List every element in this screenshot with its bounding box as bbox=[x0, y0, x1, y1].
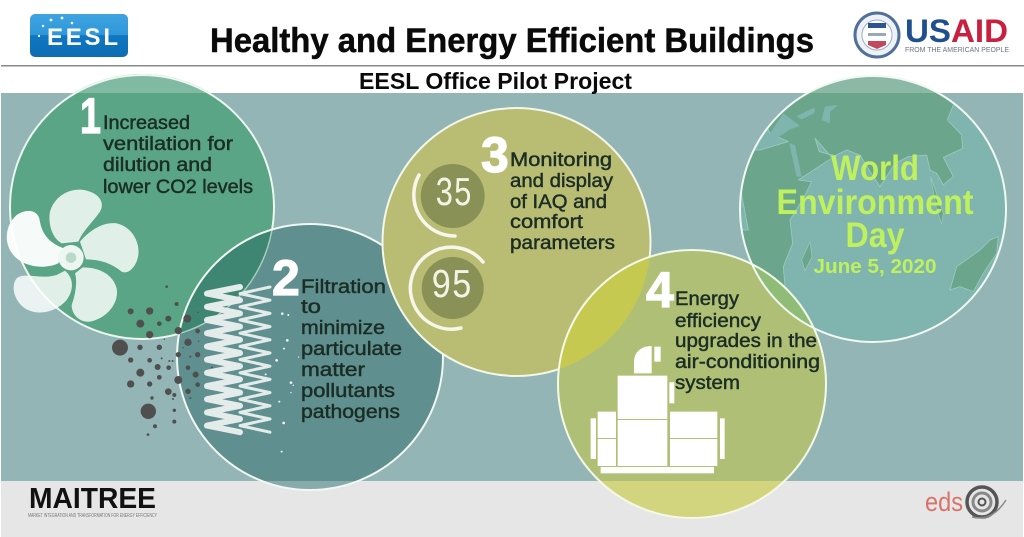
text block: World Environment Day: June 5, 2020 bbox=[814, 256, 936, 278]
description 2: to bbox=[301, 297, 321, 318]
logo: eds: eds bbox=[925, 487, 963, 517]
description 3: comfort bbox=[510, 212, 584, 233]
description 4: efficiency bbox=[675, 311, 762, 332]
description 2: Filtration bbox=[301, 277, 386, 298]
description 4: system bbox=[675, 373, 740, 394]
description 3: parameters bbox=[510, 233, 615, 254]
description 3: of IAQ and bbox=[510, 192, 607, 213]
gauge: reading 95 bbox=[410, 247, 484, 329]
text block: step 4 bbox=[646, 262, 820, 394]
description 1: Increased bbox=[103, 113, 190, 134]
title: Healthy and Energy Efficient Buildings bbox=[210, 22, 814, 60]
icon: particles bbox=[112, 285, 221, 436]
logo: MAITREE: MAITREE bbox=[29, 483, 156, 515]
subtitle: EESL Office Pilot Project bbox=[359, 68, 632, 94]
logo: MAITREE: MARKET INTEGRATION AND TRANSFORMATION FOR ENERGY EFFICIENCY bbox=[28, 513, 157, 519]
description 3 bbox=[510, 150, 615, 254]
description 4: Energy bbox=[675, 289, 740, 310]
logo: EESL: EESL bbox=[47, 24, 118, 51]
icon: clean air dots bbox=[265, 312, 299, 453]
description 1: lower CO2 levels bbox=[103, 177, 253, 198]
text block: World Environment Day bbox=[776, 149, 974, 278]
gauge: reading 35 bbox=[414, 164, 485, 236]
description 2: pathogens bbox=[301, 402, 400, 423]
icon: fan bbox=[7, 190, 139, 322]
text block: World Environment Day: Environment bbox=[776, 183, 974, 222]
number 3: 3 bbox=[481, 127, 509, 183]
text block: World Environment Day: World bbox=[831, 149, 919, 188]
panel: circle 3 monitoring bbox=[382, 108, 650, 376]
text block: step 2 bbox=[272, 250, 402, 423]
panel: globe circle bbox=[737, 67, 1010, 342]
number 4: 4 bbox=[646, 262, 674, 318]
description 2: minimize bbox=[301, 318, 385, 339]
description 1: ventilation for bbox=[103, 134, 234, 155]
icon: filter coils bbox=[207, 287, 270, 432]
header rule bbox=[1, 65, 1024, 66]
logo: USAID: USAID bbox=[905, 13, 1008, 49]
icon: chiller bbox=[591, 346, 725, 473]
panel: circle 4 energy efficiency bbox=[557, 249, 827, 519]
description 2 bbox=[301, 277, 402, 423]
logo: EESL bbox=[30, 14, 128, 57]
panel: circle 2 filtration bbox=[176, 223, 444, 491]
panel: circle 1 ventilation bbox=[0, 70, 290, 340]
logo: USAID bbox=[855, 13, 1009, 57]
description 4 bbox=[675, 289, 820, 394]
number 2: 2 bbox=[272, 250, 300, 306]
text block: step 3 bbox=[481, 127, 615, 254]
logo: eds bbox=[925, 487, 1006, 518]
description 4: air-conditioning bbox=[675, 352, 820, 373]
gauge: reading 35: 35 bbox=[435, 172, 472, 218]
description 2: particulate bbox=[301, 339, 402, 360]
logo: USAID: FROM THE AMERICAN PEOPLE bbox=[905, 45, 1009, 54]
footer band bbox=[1, 481, 1023, 537]
description 1: dilution and bbox=[103, 155, 212, 176]
description 2: pollutants bbox=[301, 381, 395, 402]
description 4: upgrades in the bbox=[675, 331, 817, 352]
description 2: matter bbox=[301, 360, 366, 381]
gauge: reading 95: 95 bbox=[431, 264, 472, 310]
description 1 bbox=[103, 113, 253, 198]
description 3: Monitoring bbox=[510, 150, 612, 171]
number 1: 1 bbox=[80, 88, 101, 144]
text block: World Environment Day: Day bbox=[846, 216, 905, 255]
description 3: and display bbox=[510, 171, 614, 192]
globe land masses bbox=[737, 67, 1010, 292]
background band bbox=[1, 93, 1023, 481]
text block: step 1 bbox=[80, 88, 253, 198]
